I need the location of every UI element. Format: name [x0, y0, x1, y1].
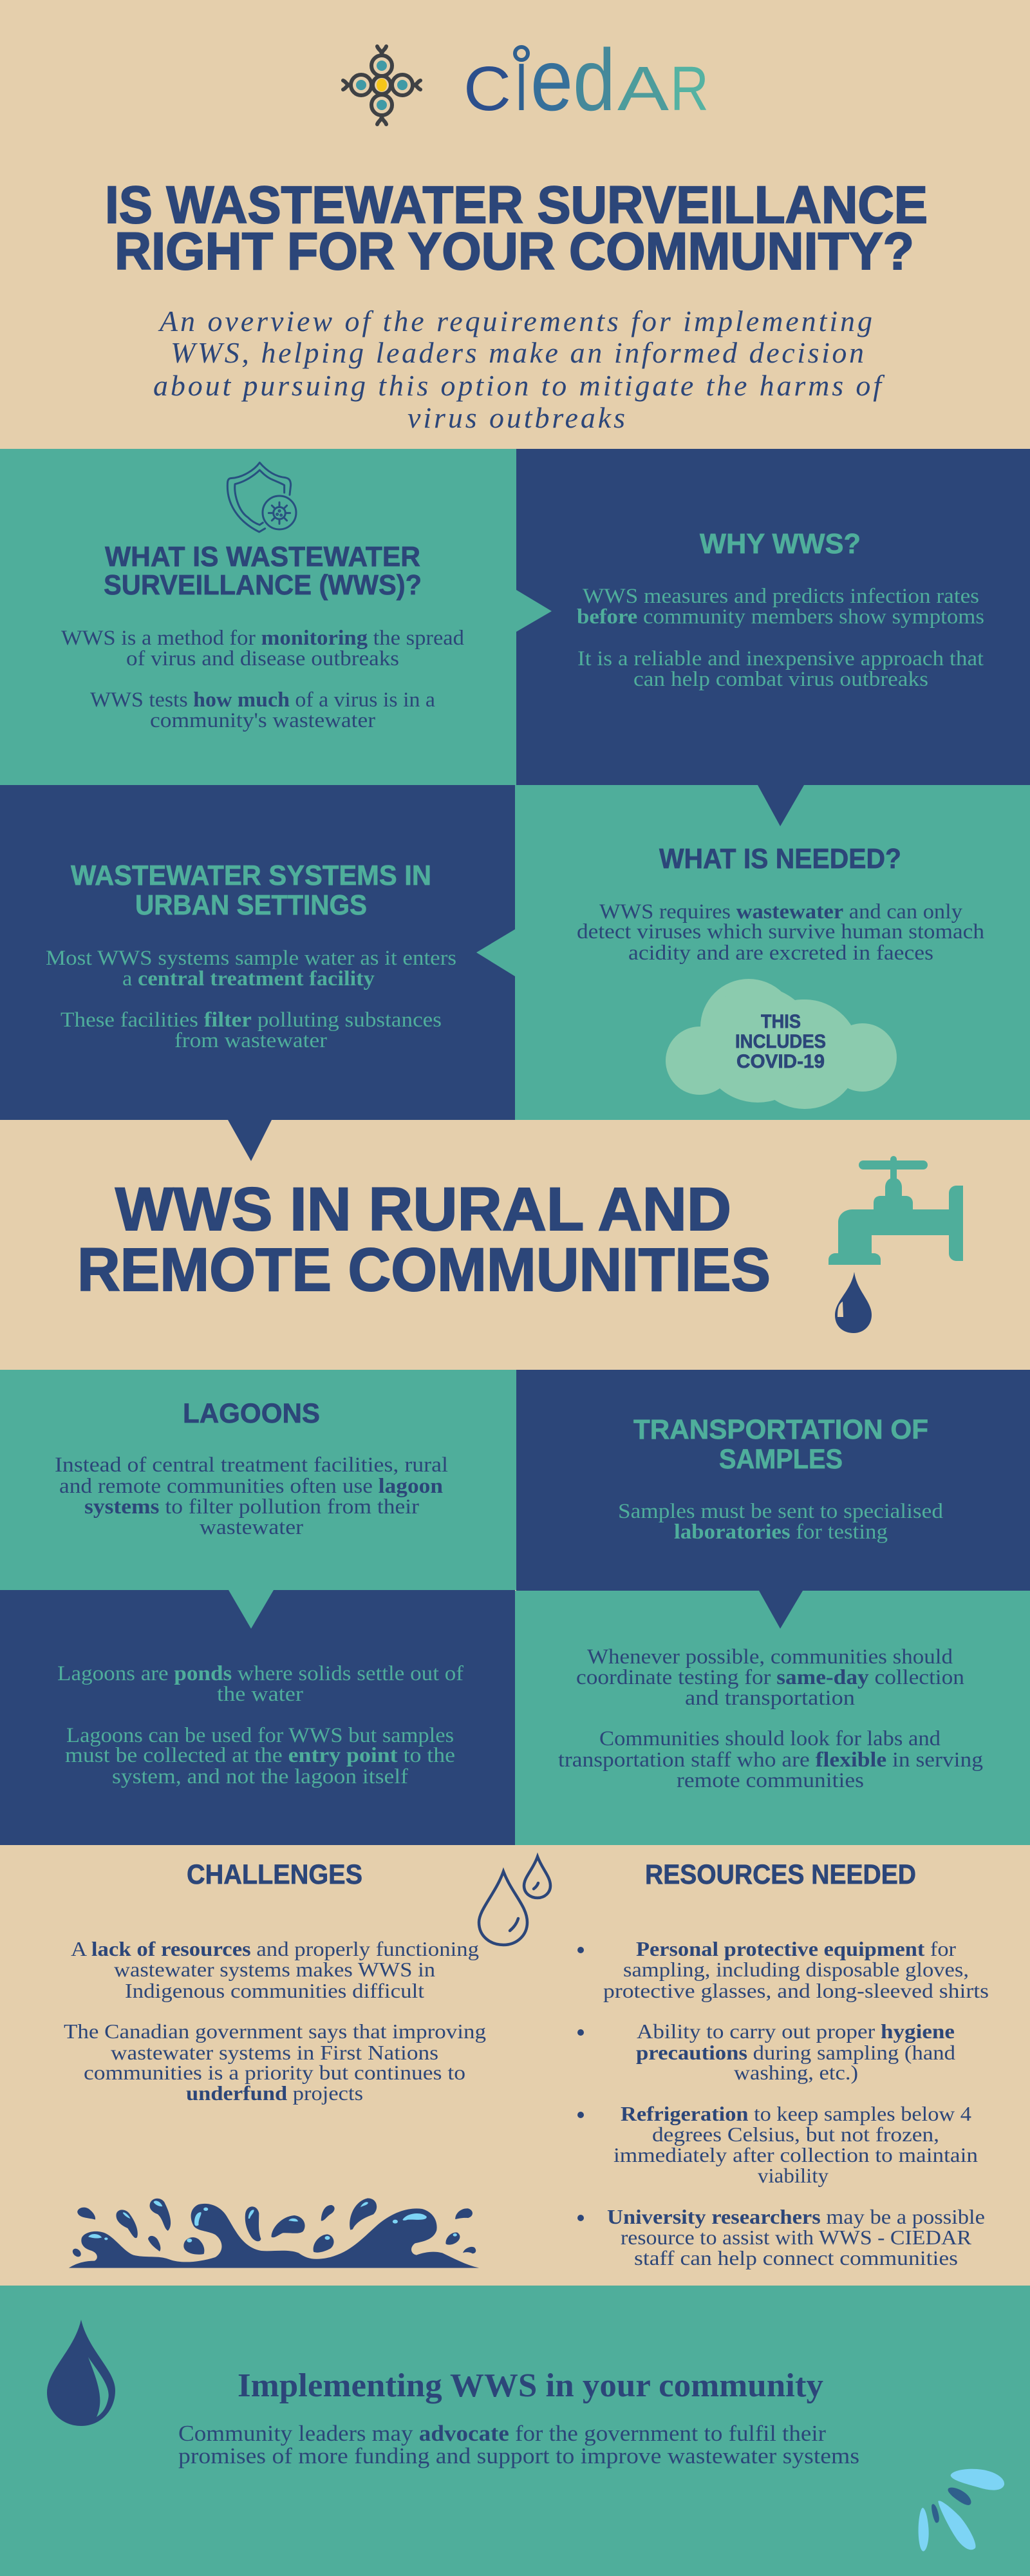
bullet list: resources [577, 1937, 989, 2269]
bullet list: resources: Ability to carry out proper hygiene [637, 2020, 955, 2043]
heading: urban settings: URBAN SETTINGS [135, 889, 367, 921]
icon: large water drop [47, 2320, 115, 2426]
text: transportation detail body: transportation staff who are flexible in serving [558, 1748, 983, 1772]
text: why WWS body: can help combat virus outbreaks [633, 668, 928, 691]
text: urban settings body: a central treatment facility [122, 967, 375, 990]
bullet list: resources: Refrigeration to keep samples below 4 [621, 2102, 971, 2125]
subtitle: WWS, helping leaders make an informed decision [171, 336, 864, 369]
text: what is WWS body: WWS tests how much of a virus is in a [90, 688, 435, 712]
heading: what is WWS [104, 541, 422, 601]
text: lagoons detail body: must be collected at the entry point to the [65, 1744, 455, 1767]
heading: what is WWS: SURVEILLANCE (WWS)? [104, 569, 422, 601]
text: what is needed body: WWS requires wastewater and can only [599, 900, 963, 923]
text: lagoons detail body: the water [217, 1683, 303, 1706]
logo wordmark: e [530, 31, 573, 129]
heading: WWS in rural and remote communities [77, 1175, 771, 1304]
heading: resources needed: RESOURCES NEEDED [645, 1859, 916, 1890]
logo wordmark [464, 31, 709, 129]
text: challenges body: communities is a priority but continues to [84, 2061, 465, 2084]
text: transportation detail body: coordinate testing for same-day collection [576, 1666, 964, 1689]
icon: four-petal emblem [343, 46, 420, 124]
text: lagoons detail body: Lagoons can be used for WWS but samples [66, 1724, 454, 1747]
text: implementing body [178, 2421, 859, 2468]
arrow: down into rural section [228, 1120, 272, 1161]
bullet list: resources: sampling, including disposable gloves, [623, 1958, 969, 1981]
text: lagoons detail body: Lagoons are ponds where solids settle out of [57, 1662, 464, 1685]
text: challenges body: wastewater systems makes WWS in [114, 1958, 435, 1981]
bullet list: resources: precautions during sampling (hand [636, 2041, 955, 2064]
text: challenges body: A lack of resources and properly functioning [71, 1937, 479, 1960]
callout: cloud this includes COVID-19: THIS [761, 1011, 801, 1032]
text: transportation body: Samples must be sent to specialised [618, 1500, 944, 1523]
text: challenges body [64, 1937, 486, 2105]
bullet list: resources: viability [758, 2164, 829, 2187]
text: transportation detail body: and transportation [685, 1687, 855, 1710]
text: why WWS body: It is a reliable and inexpensive approach that [577, 647, 984, 670]
text: urban settings body [46, 947, 456, 1052]
text: what is needed body [577, 900, 985, 965]
panel: lagoons detail [0, 1590, 515, 1845]
text: what is needed body: acidity and are excreted in faeces [628, 942, 933, 965]
text: why WWS body: WWS measures and predicts infection rates [583, 585, 979, 608]
arrow: down from lagoons [229, 1590, 274, 1629]
heading: lagoons: LAGOONS [183, 1398, 320, 1429]
callout: cloud this includes COVID-19 [666, 979, 897, 1109]
heading: challenges: CHALLENGES [187, 1859, 362, 1890]
callout: cloud this includes COVID-19: COVID-19 [736, 1051, 825, 1072]
bullet list: resources: Personal protective equipment for [636, 1937, 956, 1960]
logo wordmark: d [573, 31, 615, 129]
panel: urban settings [0, 785, 515, 1120]
text: urban settings body: from wastewater [174, 1029, 327, 1052]
text: transportation detail body: remote communities [677, 1769, 864, 1792]
text: lagoons detail body: system, and not the lagoon itself [112, 1765, 408, 1788]
text: challenges body: The Canadian government says that improving [64, 2020, 486, 2043]
panel: resources needed [577, 1859, 989, 2269]
heading: what is WWS: WHAT IS WASTEWATER [105, 541, 420, 573]
text: what is WWS body: WWS is a method for monitoring the spread [61, 627, 465, 650]
bullet list: resources: washing, etc.) [734, 2061, 858, 2084]
heading: transportation of samples: SAMPLES [719, 1444, 843, 1475]
text: challenges body: underfund projects [186, 2081, 363, 2105]
text: transportation detail body [558, 1645, 983, 1792]
bullet list: resources: resource to assist with WWS - CIEDAR [621, 2226, 972, 2249]
heading: what is needed: WHAT IS NEEDED? [659, 843, 901, 875]
text: transportation body: laboratories for testing [674, 1520, 888, 1544]
arrow: points left from what is needed [476, 929, 515, 976]
text: transportation body [618, 1500, 944, 1544]
icon: outlined water drops [479, 1857, 550, 1945]
bullet list: resources: immediately after collection to maintain [613, 2143, 978, 2166]
arrow: points to why WWS [516, 590, 552, 632]
title: IS WASTEWATER SURVEILLANCE [105, 176, 928, 234]
bullet list: resources: University researchers may be a possible [607, 2205, 985, 2228]
text: urban settings body: Most WWS systems sample water as it enters [46, 947, 456, 970]
text: urban settings body: These facilities filter polluting substances [61, 1009, 442, 1032]
logo wordmark: C [464, 53, 511, 124]
title [105, 176, 928, 281]
panel: what is needed [515, 785, 1030, 1120]
panel: transportation detail [515, 1591, 1030, 1845]
arrow: down from transportation [759, 1591, 803, 1629]
text: challenges body: Indigenous communities difficult [125, 1979, 424, 2002]
bullet list: resources: protective glasses, and long-sleeved shirts [603, 1979, 989, 2002]
text: challenges body: wastewater systems in First Nations [111, 2041, 438, 2064]
subtitle: virus outbreaks [407, 401, 625, 434]
text: what is needed body: detect viruses which survive human stomach [577, 920, 985, 943]
callout: cloud this includes COVID-19: INCLUDES [735, 1031, 826, 1052]
icon: water splash [69, 2198, 479, 2268]
heading: transportation of samples: TRANSPORTATION OF [633, 1414, 928, 1445]
text: implementing body: promises of more funding and support to improve wastewater systems [178, 2443, 859, 2468]
text: what is WWS body [61, 627, 465, 732]
text: lagoons body: and remote communities often use lagoon [59, 1475, 443, 1498]
panel: challenges [64, 1859, 486, 2268]
text: lagoons detail body [57, 1662, 464, 1788]
logo wordmark: A [617, 53, 669, 124]
text: what is WWS body: of virus and disease outbreaks [126, 647, 399, 670]
panel: lagoons [0, 1370, 516, 1590]
panel: what is wastewater surveillance [0, 449, 552, 785]
icon: faucet with drop [829, 1156, 963, 1333]
logo wordmark: i [516, 31, 527, 129]
text: lagoons body: Instead of central treatment facilities, rural [55, 1454, 448, 1477]
icon: shield with virus [227, 462, 296, 532]
subtitle: An overview of the requirements for implementing [158, 305, 872, 337]
heading: transportation of samples [633, 1414, 928, 1475]
text: lagoons body: systems to filter pollution from their [84, 1495, 419, 1519]
text: lagoons body: wastewater [200, 1516, 303, 1539]
logo: CIEDAR [343, 31, 709, 129]
text: transportation detail body: Whenever possible, communities should [587, 1645, 953, 1669]
text: lagoons body [55, 1454, 448, 1539]
icon: small splash [919, 2469, 1004, 2552]
bullet list: resources: staff can help connect communities [634, 2246, 958, 2269]
heading: urban settings [71, 860, 431, 921]
text: what is WWS body: community's wastewater [150, 709, 375, 732]
panel: transportation of samples [516, 1370, 1030, 1591]
text: implementing body: Community leaders may advocate for the government to fulfil their [178, 2421, 826, 2446]
title: RIGHT FOR YOUR COMMUNITY? [115, 222, 914, 281]
heading: WWS in rural and remote communities: WWS IN RURAL AND [115, 1175, 731, 1244]
subtitle: about pursuing this option to mitigate the harms of [153, 369, 885, 402]
heading: implementing WWS: Implementing WWS in your community [238, 2367, 823, 2404]
logo wordmark: R [670, 53, 709, 124]
text: why WWS body [577, 585, 984, 691]
heading: why WWS: WHY WWS? [700, 528, 861, 560]
panel: implementing WWS [0, 2286, 1030, 2576]
panel: why WWS [516, 449, 1030, 786]
text: why WWS body: before community members show symptoms [577, 605, 984, 629]
heading: urban settings: WASTEWATER SYSTEMS IN [71, 860, 431, 891]
heading: WWS in rural and remote communities: REMOTE COMMUNITIES [77, 1236, 771, 1304]
text: transportation detail body: Communities should look for labs and [599, 1727, 941, 1750]
bullet list: resources: degrees Celsius, but not frozen, [652, 2123, 939, 2146]
arrow: down from why WWS [758, 785, 804, 826]
subtitle [153, 305, 885, 434]
